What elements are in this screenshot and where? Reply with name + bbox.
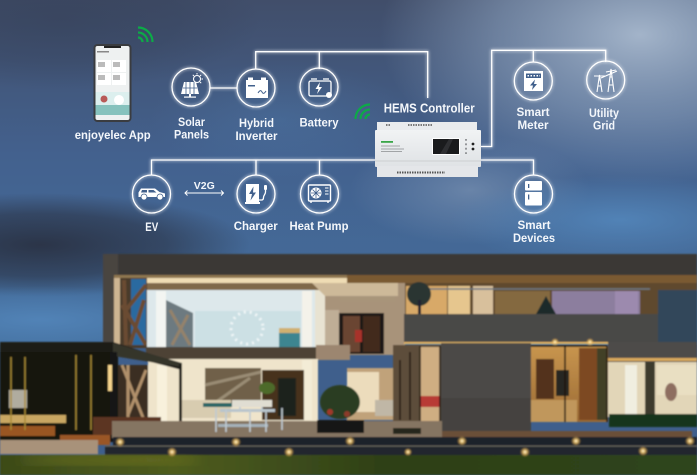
- icon: app wifi signal: [138, 28, 152, 42]
- label: enjoyelec App: enjoyelec App: [75, 130, 151, 142]
- icon: smart meter: [514, 62, 552, 100]
- label: Smart Devices: Devices: [513, 233, 555, 245]
- icon: charger: [237, 175, 275, 213]
- steps: [113, 437, 697, 446]
- icon: EV car: [132, 175, 170, 213]
- potted plants: [317, 420, 364, 433]
- roof band: [103, 254, 697, 275]
- label: Utility Grid: [589, 108, 620, 132]
- label: Solar Panels: [174, 117, 209, 142]
- right of upper room: [325, 283, 405, 355]
- background: evening sky: [0, 0, 697, 354]
- label: Utility Grid: Grid: [593, 120, 615, 132]
- balcony band: [146, 347, 316, 359]
- label: EV: EV: [145, 222, 158, 234]
- upper left lattice: [114, 278, 120, 346]
- icon: utility grid: [587, 61, 625, 99]
- warm glass room: [531, 346, 608, 422]
- label: Hybrid Inverter: Inverter: [236, 131, 278, 143]
- photo: modern house at dusk: [0, 254, 697, 475]
- label: Solar Panels: Panels: [174, 130, 209, 142]
- phone: enjoyelec App: [94, 44, 132, 122]
- label: Utility Grid: Utility: [589, 108, 620, 120]
- step lights: [115, 338, 695, 457]
- icon: controller wifi signal: [356, 104, 370, 119]
- left pergola area: [0, 345, 118, 440]
- label: V2G: V2G: [194, 181, 215, 192]
- hedge: [609, 414, 697, 427]
- label: Heat Pump: Heat Pump: [290, 221, 348, 233]
- concrete balcony: [404, 314, 658, 342]
- icon: heat pump: [300, 175, 338, 213]
- right bright room: [608, 358, 697, 361]
- dining set: [216, 400, 282, 432]
- icon: solar panels: [172, 68, 210, 106]
- balcony plants: [407, 282, 431, 306]
- upper right windows: [405, 283, 697, 314]
- arrow: V2G bidirectional: [185, 190, 224, 196]
- label: Smart Meter: Smart: [516, 107, 550, 119]
- label: Smart Meter: Meter: [518, 120, 549, 132]
- label: Smart Devices: [513, 220, 555, 245]
- upper glass room: [147, 290, 325, 348]
- lower interior: [148, 359, 318, 421]
- icon: battery: [300, 68, 338, 106]
- icon: hybrid inverter: [237, 69, 275, 107]
- left of column glass: [393, 345, 443, 430]
- label: Battery: Battery: [300, 118, 339, 130]
- grass: [0, 455, 697, 475]
- concrete column: [441, 343, 531, 433]
- label: Smart Meter: [516, 107, 550, 132]
- label: Solar Panels: Solar: [178, 117, 205, 129]
- terrace: [112, 421, 442, 438]
- label: Charger: Charger: [234, 221, 278, 233]
- icon: smart devices: [514, 175, 552, 213]
- device: HEMS controller: [375, 122, 481, 177]
- label: Hybrid Inverter: Hybrid: [239, 118, 274, 130]
- label: Smart Devices: Smart: [518, 220, 551, 232]
- label: HEMS Controller: HEMS Controller: [384, 101, 475, 116]
- connector lines: [152, 50, 606, 175]
- label: Hybrid Inverter: [236, 118, 278, 143]
